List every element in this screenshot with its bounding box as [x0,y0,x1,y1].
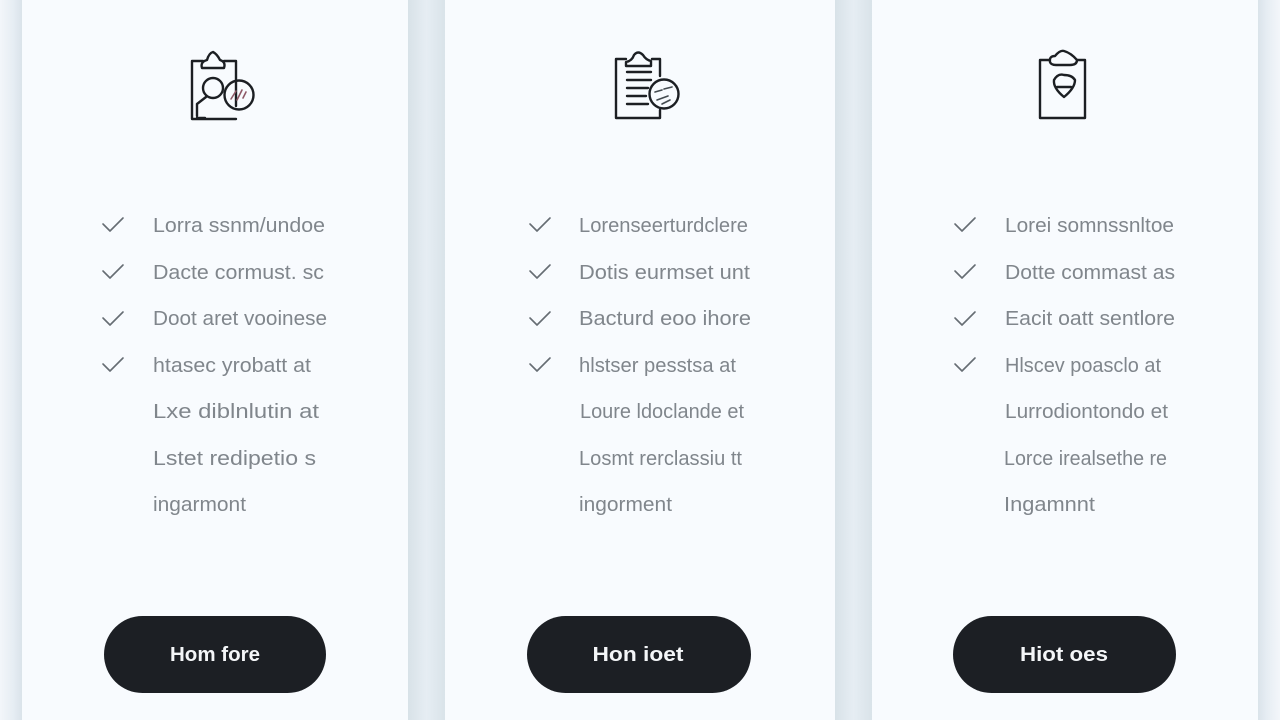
list item 2: Dotte commast as [1005,262,1175,284]
check icon 4 [530,358,550,371]
button [527,616,751,693]
list item 1: Lorei somnssnltoe [1005,215,1174,237]
list item 1: Lorra ssnm/undoe [153,215,325,237]
check icon 3 [955,312,975,325]
check icon 2 [103,265,123,278]
list item 7: ingorment [579,494,672,516]
checklist [955,215,1175,516]
list item 6: Lstet redipetio s [153,448,316,470]
panel: plan card 1 [22,0,408,720]
list item 1: Lorenseerturdclere [579,215,748,237]
button: Hon ioet [592,644,684,666]
list item 4: Hlscev poasclo at [1005,355,1161,377]
check icon 1 [955,218,975,231]
list item 7: Ingamnnt [1004,494,1095,516]
check icon 4 [103,358,123,371]
checklist [103,215,327,516]
check icon 3 [103,312,123,325]
list item 7: ingarmont [153,494,246,516]
list item 3: Eacit oatt sentlore [1005,308,1175,330]
list item 4: htasec yrobatt at [153,355,311,377]
check icon 1 [103,218,123,231]
check icon 4 [955,358,975,371]
button: Hiot oes [1020,644,1108,666]
list item 3: Bacturd eoo ihore [579,308,751,330]
button: Hom fore [170,644,260,666]
checklist [530,215,751,516]
icon: clipboard with list and badge [616,52,678,118]
button [104,616,326,693]
list item 4: hlstser pesstsa at [579,355,736,377]
check icon 2 [955,265,975,278]
list item 2: Dotis eurmset unt [579,262,750,284]
panel: plan card 3 [872,0,1258,720]
list item 5: Lxe diblnlutin at [153,401,320,423]
list item 2: Dacte cormust. sc [153,262,324,284]
list item 5: Lurrodiontondo et [1005,401,1168,423]
check icon 3 [530,312,550,325]
panel: plan card 2 [445,0,835,720]
list item 6: Losmt rerclassiu tt [579,448,742,470]
list item 6: Lorce irealsethe re [1004,448,1167,470]
check icon 2 [530,265,550,278]
button [953,616,1176,693]
list item 3: Doot aret vooinese [153,308,327,330]
list item 5: Loure ldoclande et [580,401,744,423]
check icon 1 [530,218,550,231]
icon: clipboard with badge [1040,51,1085,118]
icon: clipboard with person and magnifier [192,52,254,119]
